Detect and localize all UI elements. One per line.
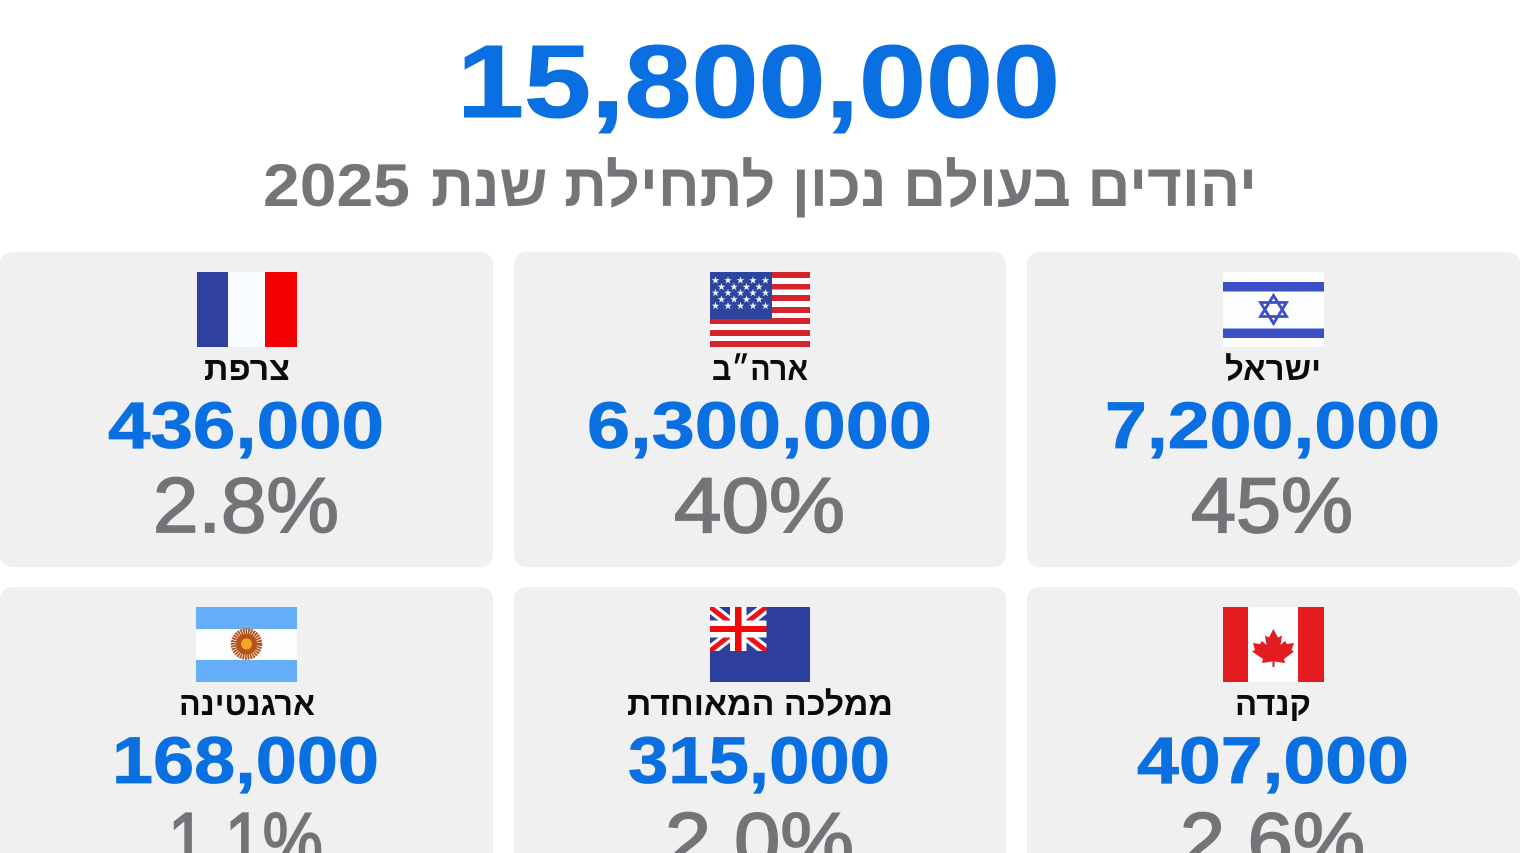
icon: USA flag: ★ — [724, 276, 732, 285]
count: 6,300,000 — [587, 388, 932, 462]
icon: USA flag: ★ — [762, 276, 770, 285]
icon: USA flag: ★ — [736, 276, 744, 285]
icon: Israel flag — [1223, 272, 1324, 347]
icon: USA flag: ★ — [755, 295, 763, 304]
icon: USA flag: ★ — [749, 288, 757, 298]
count: 436,000 — [108, 388, 384, 462]
percent: 2.8% — [153, 461, 339, 549]
country name: ארגנטינה — [179, 685, 315, 722]
icon: USA flag: ★ — [749, 276, 757, 285]
icon: USA flag: ★ — [755, 282, 763, 292]
subtitle: יהודים בעולם נכון לתחילת שנת — [431, 152, 1257, 219]
icon: USA flag — [710, 272, 810, 347]
icon: USA flag: ★ — [762, 288, 770, 298]
percent: 40% — [674, 461, 845, 549]
count: 315,000 — [628, 723, 890, 797]
icon: USA flag: ★ — [736, 302, 744, 310]
panel: United Kingdom — [514, 587, 1006, 853]
icon: USA flag: ★ — [730, 295, 738, 304]
icon: USA flag: ★ — [742, 282, 750, 292]
country name: ישראל — [1225, 350, 1321, 387]
country name: ממלכה המאוחדת — [627, 685, 893, 722]
icon: USA flag: ★ — [712, 276, 720, 285]
icon: UK flag — [710, 607, 810, 682]
count: 168,000 — [112, 723, 379, 797]
icon: USA flag: ★ — [736, 288, 744, 298]
percent: 45% — [1191, 461, 1353, 549]
icon: Argentina flag — [196, 607, 297, 682]
panel: France — [0, 252, 493, 567]
icon: USA flag: ★ — [718, 295, 726, 304]
icon: USA flag: ★ — [724, 302, 732, 310]
icon: USA flag: ★ — [712, 288, 720, 298]
panel: Canada — [1027, 587, 1520, 853]
country name: קנדה — [1235, 685, 1311, 722]
count: 7,200,000 — [1105, 388, 1440, 462]
country name: צרפת — [204, 350, 290, 387]
icon: USA flag: ★ — [742, 295, 750, 304]
icon: USA flag: ★ — [718, 282, 726, 292]
icon: Canada flag — [1223, 607, 1324, 682]
icon: USA flag: ★ — [749, 302, 757, 310]
icon: France flag — [197, 272, 297, 347]
icon: USA flag: ★ — [724, 288, 732, 298]
icon: USA flag: ★ — [762, 302, 770, 310]
count: 407,000 — [1137, 723, 1409, 797]
subtitle: 2025 — [263, 152, 410, 219]
title: total number: 15,800,000 — [457, 24, 1060, 139]
icon: USA flag: ★ — [712, 302, 720, 310]
panel: USA — [514, 252, 1006, 567]
country name: ארה״ב — [712, 350, 808, 387]
panel: Argentina — [0, 587, 493, 853]
icon: USA flag: ★ — [730, 282, 738, 292]
panel: Israel — [1027, 252, 1520, 567]
